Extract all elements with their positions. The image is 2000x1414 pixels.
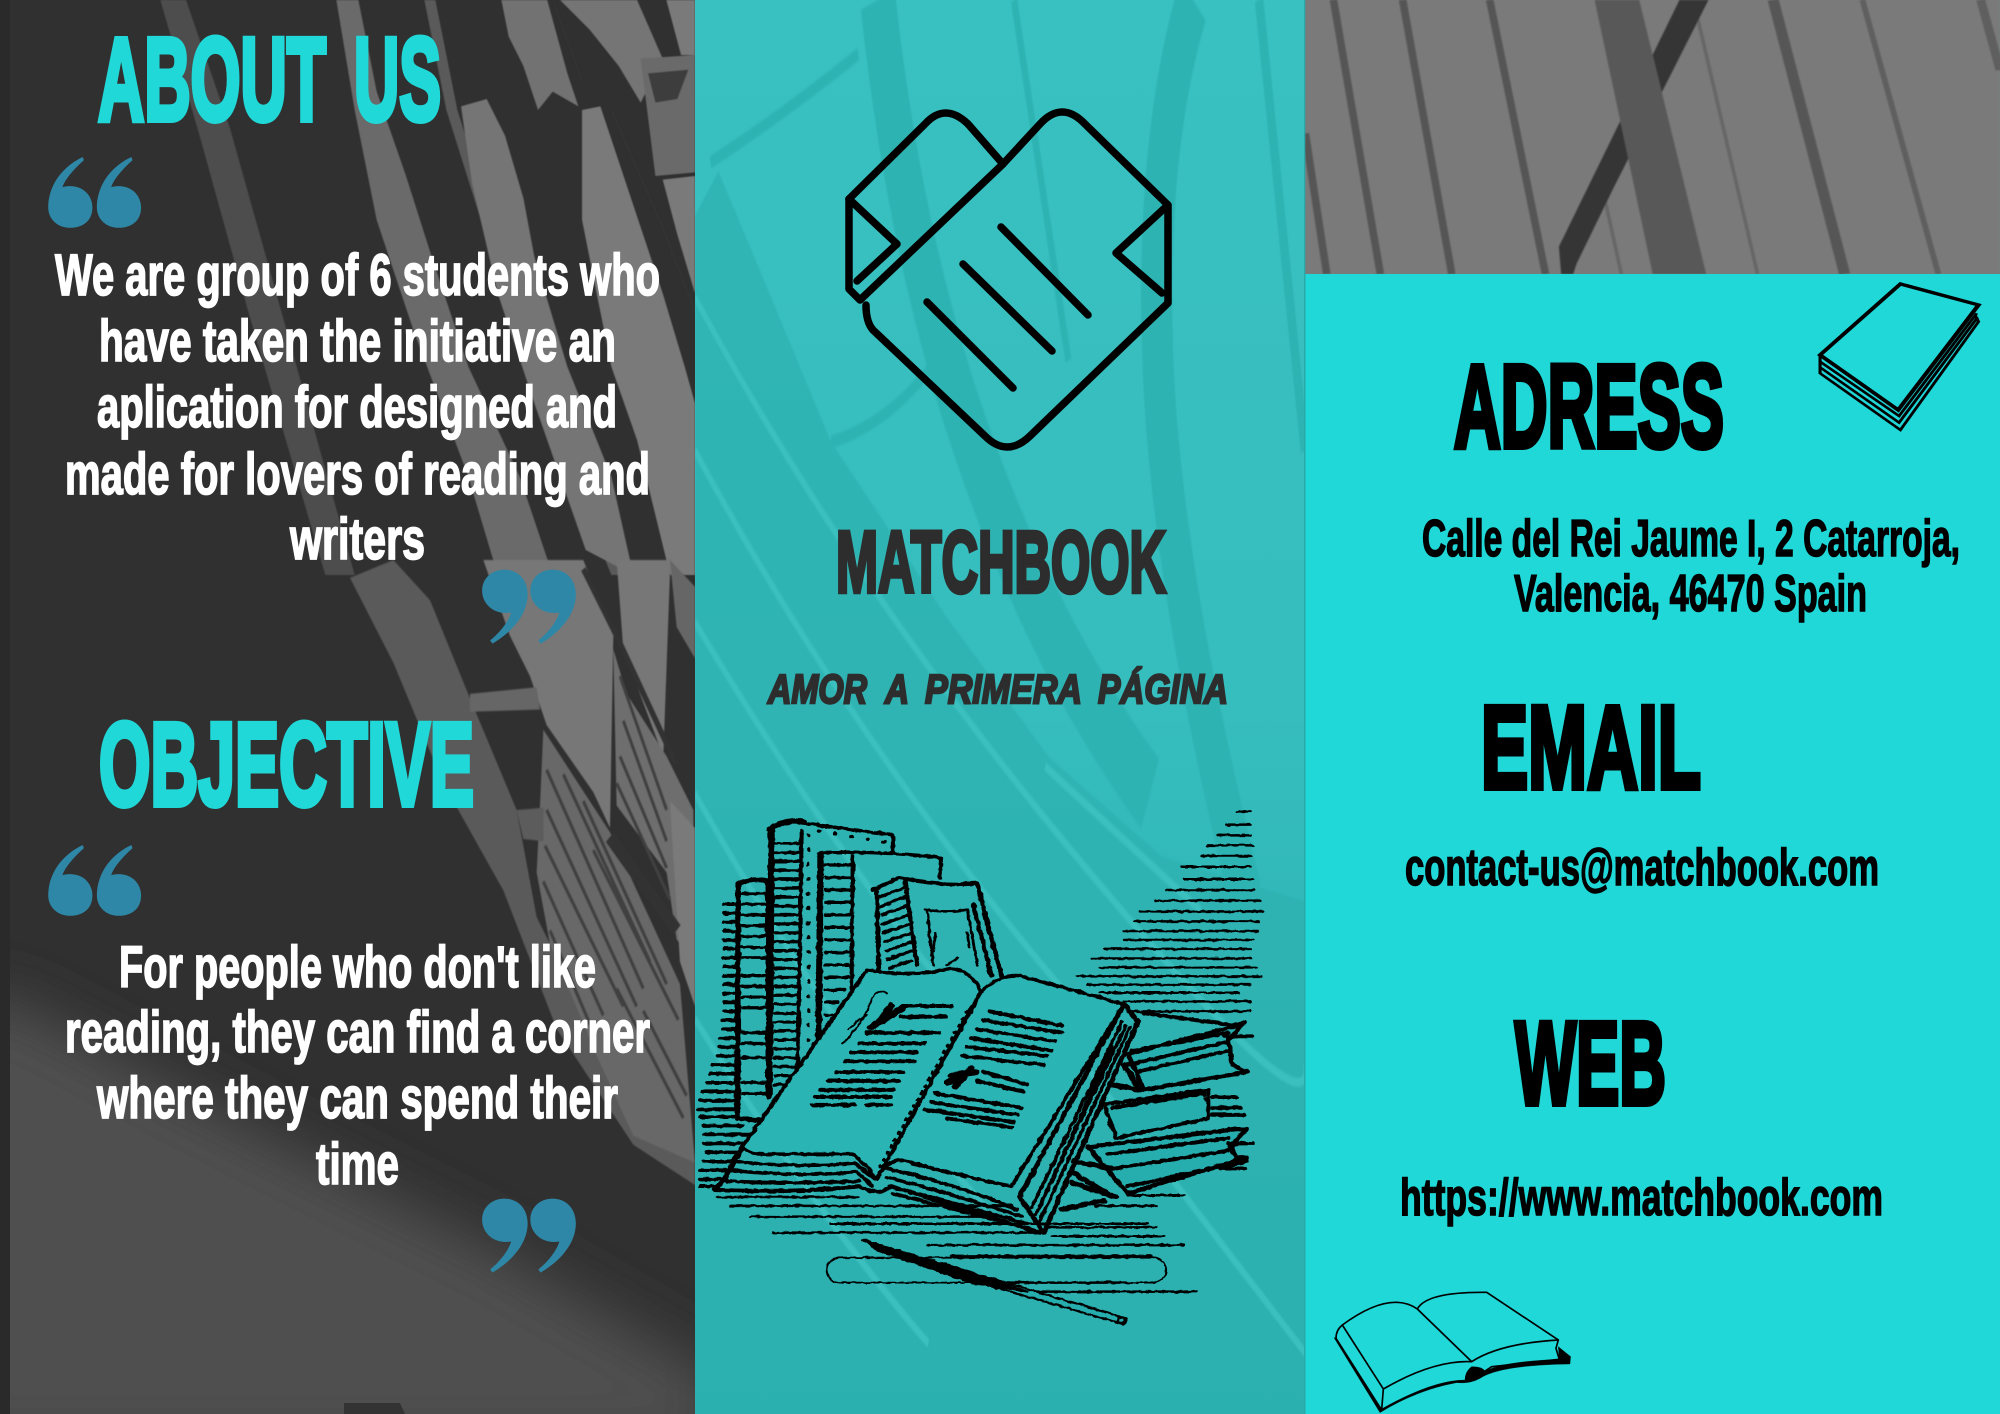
text block: about us body: We are group of 6 students who — [55, 243, 660, 308]
text block: about us body: aplication for designed and — [97, 375, 617, 440]
text block: objective body: reading, they can find a corner — [65, 1000, 650, 1065]
tagline: PÁGINA — [1098, 666, 1228, 712]
icon: opening quote, objective — [48, 845, 141, 916]
icon: open book — [1334, 1292, 1571, 1413]
background photo: gray shelves — [1305, 0, 2000, 274]
upper right hatching — [1078, 811, 1263, 1011]
text block: about us body — [55, 243, 660, 572]
fore edge — [1019, 1004, 1138, 1233]
heading: web: WEB — [1515, 998, 1666, 1130]
left page text — [813, 1006, 951, 1105]
framed cover book — [873, 877, 1001, 976]
page layers — [714, 1147, 1040, 1233]
background photo: teal bookshelf tint — [695, 0, 1306, 1414]
right page text — [925, 1011, 1062, 1127]
text block: address — [1422, 510, 1960, 623]
panel: left about and objective — [0, 0, 720, 1414]
text block: about us body: made for lovers of reading and — [65, 442, 650, 507]
stacked spine books — [698, 821, 941, 1186]
tagline: AMOR — [767, 666, 867, 712]
heading: about us: ABOUT — [98, 14, 326, 146]
icon: closing quote, objective — [482, 1199, 576, 1273]
panel: right contact — [1304, 0, 2000, 1414]
heading: about us: US — [354, 14, 441, 146]
background photo: bookshelf — [0, 0, 720, 1414]
right stacked books — [1088, 1022, 1246, 1193]
panel: center brand — [695, 0, 1306, 1414]
tagline — [767, 666, 1228, 712]
lower shelf book stacks — [350, 560, 695, 1185]
upper shelf streaks — [160, 0, 695, 575]
icon: closed book — [1820, 284, 1979, 430]
pen rest outline — [827, 1258, 1166, 1283]
heading: objective: OBJECTIVE — [99, 699, 474, 831]
text block: about us body: writers — [289, 507, 425, 572]
text block: objective body: time — [316, 1132, 399, 1197]
tagline: A — [884, 666, 909, 712]
heading: adress: ADRESS — [1454, 341, 1724, 473]
table hatching — [718, 1195, 1196, 1292]
title: matchbook: MATCHBOOK — [836, 514, 1166, 611]
logo: folded book heart — [849, 112, 1168, 447]
illustration: open book with stacked books and pen — [698, 811, 1263, 1324]
pen — [863, 1240, 1126, 1324]
icon: closing quote, about us — [482, 570, 576, 644]
text block: objective body — [65, 935, 650, 1197]
text block: objective body: For people who don't like — [119, 935, 596, 1000]
text block: objective body: where they can spend their — [96, 1066, 618, 1131]
open book pages — [742, 968, 1124, 1186]
text block: about us body: have taken the initiative an — [99, 309, 616, 374]
tagline: PRIMERA — [925, 666, 1082, 712]
icon: opening quote, about us — [48, 157, 141, 228]
heading: email: EMAIL — [1481, 682, 1701, 814]
